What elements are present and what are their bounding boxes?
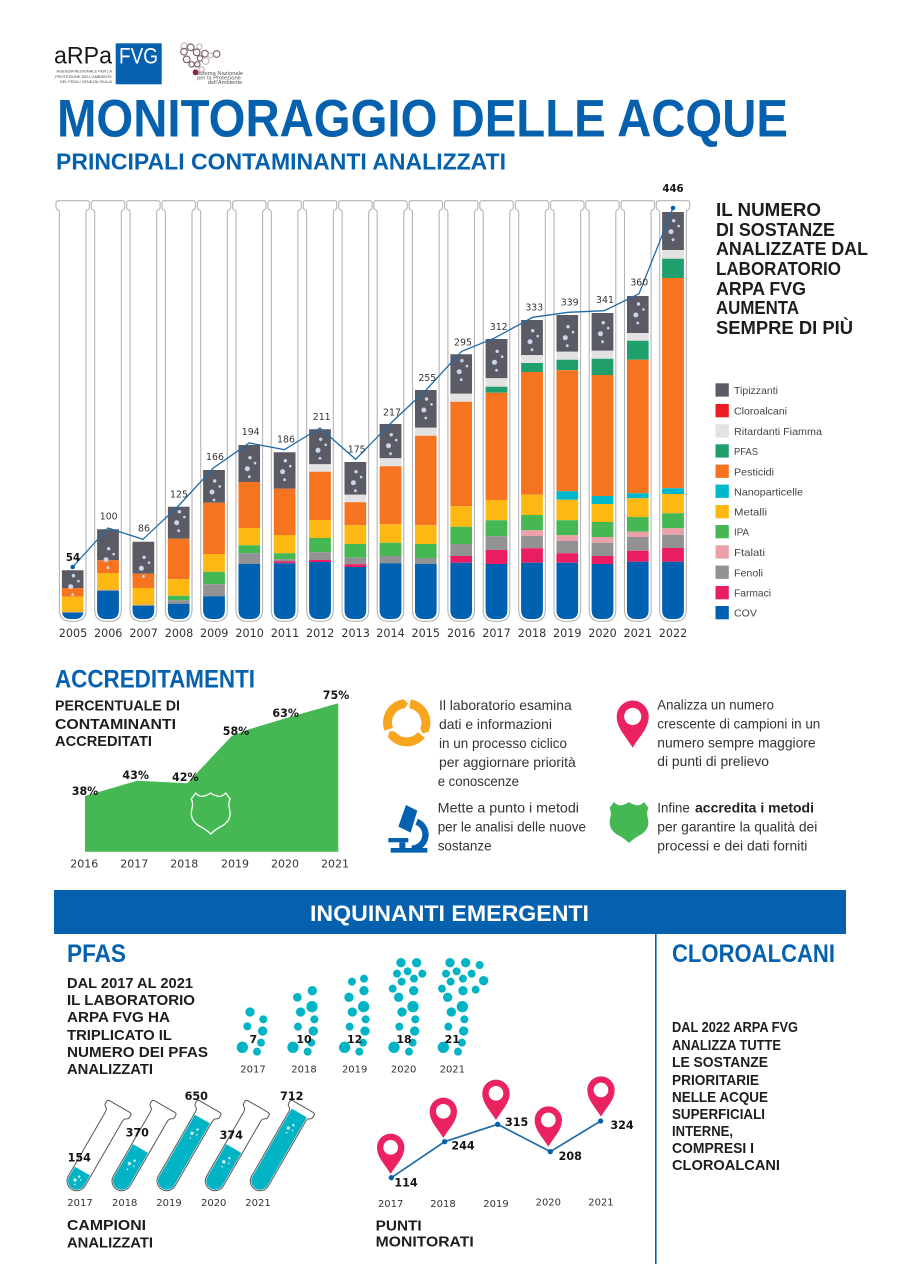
text: cloroalcani statement: COMPRESI I [672,1140,754,1157]
text: cloroalcani statement: SUPERFICIALI [672,1106,765,1123]
legend: IPA [734,528,749,539]
line chart: punti monitorati [377,1076,634,1210]
tube: 2007 [127,201,160,621]
year labels: 2008 [165,627,193,640]
sample years: 2021 [245,1198,271,1209]
text: punti monitorati: MONITORATI [376,1234,474,1251]
icon: microscope [388,805,427,853]
tube: 2017 [480,201,513,621]
logo: Sistema Nazionale per la Protezione dell'Ambiente: dell'Ambiente [208,80,242,86]
value labels: 100 [100,512,118,522]
tube: 2016 [444,201,478,621]
value labels: 211 [313,412,331,423]
year labels: 2010 [235,627,264,640]
point values: 315 [505,1116,528,1129]
tilted tube: 2018 [105,1100,177,1196]
tube: 2008 [162,201,195,621]
tube: 2014 [374,201,407,621]
point years: 2019 [483,1199,509,1210]
point years: 2021 [588,1197,614,1208]
text: accredita [657,799,817,854]
value labels: 339 [561,298,579,308]
value labels: 312 [490,322,508,333]
text: metodi: sostanze [438,838,492,854]
tube: 2011 [268,201,301,621]
year labels: 2021 [624,627,652,640]
sample counts: 370 [126,1126,149,1139]
bubbles: 2019 [339,975,370,1056]
text: campioni: numero sempre maggiore [657,734,816,750]
tube: 2010 [233,201,266,621]
logo: ARPA FVG: DEL FRIULI VENEZIA GIULIA [60,79,112,84]
sample years: 2018 [112,1198,137,1209]
text: punti monitorati: PUNTI [376,1218,422,1235]
bubbles: 2018 [287,986,318,1056]
bubble counts: 21 [445,1033,460,1046]
value labels: 217 [383,408,401,418]
text: ciclo [438,697,576,789]
value labels: 125 [170,490,188,500]
bubble counts: 18 [396,1033,412,1046]
area chart: accredited percentage [70,689,349,870]
pins [377,1076,615,1174]
sample counts: 712 [280,1090,303,1103]
value labels: 166 [206,452,224,463]
bubble years: 2017 [240,1065,266,1076]
tilted tube: 2021 [243,1100,315,1196]
trend line [70,206,675,569]
text: campioni: crescente di campioni in un [657,715,820,731]
year labels: 2022 [659,627,687,640]
logo: ARPA FVG: PROTEZIONE DELL'AMBIENTE [55,74,112,79]
point values: 244 [451,1139,475,1152]
heading: cloroalcani: CLOROALCANI [672,940,835,968]
heading: PFAS: PFAS [67,940,126,968]
icon: shield outline [191,793,230,834]
text: accredita: Infine [657,799,690,815]
bubble years: 2018 [291,1065,317,1076]
text: percentuale di contaminanti accreditati [55,699,180,750]
tilted tube: 2019 [150,1100,222,1196]
text: campioni analizzati: CAMPIONI [67,1217,146,1234]
year labels: 2019 [221,858,249,870]
tube: 2020 [586,201,619,621]
text: accredita: per garantire la qualità dei [657,819,817,835]
icon: green shield [610,802,648,843]
value labels: 333 [525,302,543,314]
sample counts [68,1090,303,1165]
statement: number of substances: LABORATORIO [716,258,841,279]
year labels: 2011 [271,627,299,640]
percentage labels: 38% [72,785,98,798]
text: percentuale di contaminanti accreditati: CONTAMINANTI [55,717,176,733]
logo: Sistema Nazionale per la Protezione dell'Ambiente: Sistema Nazionale [195,71,243,77]
text: ciclo: in un processo ciclico [439,735,567,751]
text: cloroalcani statement: LE SOSTANZE [672,1054,768,1071]
year labels: 2016 [447,627,475,640]
text: PFAS statement: TRIPLICATO IL [67,1027,172,1044]
value labels: 194 [242,427,260,438]
value labels: 446 [662,184,684,195]
legend: Fenoli [734,568,763,579]
text: cloroalcani statement: PRIORITARIE [672,1072,759,1089]
text: ciclo: Il laboratorio esamina [439,697,572,713]
point values: 114 [394,1176,418,1189]
legend: Farmaci [734,589,771,600]
text: punti monitorati [376,1218,474,1251]
year labels: 2005 [59,627,87,640]
sample years: 2020 [201,1198,226,1209]
sample years: 2017 [67,1198,93,1209]
bubble years: 2021 [440,1065,465,1076]
statement: number of substances: DI SOSTANZE [716,219,835,240]
text: metodi: Mette a punto i metodi [438,800,579,816]
year labels: 2018 [518,627,546,640]
year labels: 2019 [553,627,582,640]
percentage labels: 42% [172,771,199,784]
year labels: 2006 [94,627,122,640]
statement: number of substances: SEMPRE DI PIÙ [716,317,853,338]
banner: inquinanti emergenti: INQUINANTI EMERGENTI [310,901,589,926]
year labels [70,858,349,870]
legend: COV [734,609,757,620]
banner: inquinanti emergenti [54,890,846,934]
icon: cycle [379,698,429,751]
value labels: 255 [418,373,436,384]
year labels: 2015 [412,627,440,640]
year labels: 2007 [129,627,158,640]
year labels: 2012 [306,627,334,640]
text: cloroalcani statement: INTERNE, [672,1123,733,1140]
value labels: 295 [454,338,472,348]
value labels: 360 [630,278,648,288]
text: PFAS statement: ANALIZZATI [67,1061,153,1078]
tube: 2013 [339,201,372,621]
logo: ARPA FVG: aRPa [54,42,112,70]
legend: Pesticidi [734,467,774,478]
value labels: 341 [596,295,614,306]
title: MONITORAGGIO DELLE ACQUE [57,90,788,149]
year labels [59,627,687,640]
bubble chart: PFAS per year [237,958,488,1076]
statement: number of substances: AUMENTA [716,297,799,318]
subtitle: PRINCIPALI CONTAMINANTI ANALIZZATI [56,148,506,174]
statement: number of substances: IL NUMERO [716,199,821,220]
year labels: 2021 [321,858,349,870]
text: PFAS statement: IL LABORATORIO [67,992,195,1009]
point values: 324 [610,1119,634,1132]
text: campioni: Analizza un numero [657,696,774,712]
text: PFAS statement: NUMERO DEI PFAS [67,1044,208,1061]
point values [394,1116,634,1189]
icon: map pin [617,701,649,748]
legend: PFAS [734,447,758,458]
year labels: 2020 [271,858,299,870]
year labels: 2013 [341,627,370,640]
percentage labels: 63% [272,707,299,720]
text: cloroalcani statement: CLOROALCANI [672,1157,780,1174]
text: cloroalcani statement: DAL 2022 ARPA FVG [672,1019,798,1036]
sample counts: 374 [220,1129,243,1142]
text: cloroalcani statement: ANALIZZA TUTTE [672,1037,781,1054]
point years [378,1197,614,1210]
legend: Tipizzanti [734,386,778,397]
tube chart: substances per year [56,184,690,640]
text: accredita: processi e dei dati forniti [657,838,807,854]
sample years: 2019 [156,1198,182,1209]
bubble years: 2020 [391,1065,416,1076]
legend: Ftalati [734,548,765,559]
bubbles: 2021 [438,958,488,1056]
text: metodi [438,800,586,854]
year labels: 2020 [588,627,617,640]
tube: 2006 [91,201,125,621]
logo: Sistema Nazionale per la Protezione dell'Ambiente [181,43,243,86]
tube: 2018 [515,201,549,621]
statement: number of substances [716,199,868,338]
text: ciclo: per aggiornare priorità [439,754,576,770]
statement: number of substances: ARPA FVG [716,278,806,299]
legend: Metalli [734,508,767,519]
tube: 2015 [409,201,442,621]
logo: ARPA FVG [54,42,162,84]
trend line [389,1118,603,1180]
year labels: 2018 [170,858,198,870]
bubbles: 2020 [388,958,426,1056]
text: campioni [657,696,820,769]
value labels: 186 [277,434,295,446]
percentage labels [72,689,349,798]
tube: 2009 [197,201,231,621]
sample counts: 154 [68,1152,91,1165]
text: PFAS statement: ARPA FVG HA [67,1009,170,1026]
legend: Ritardanti Fiamma [734,427,822,438]
text: metodi: per le analisi delle nuove [438,819,586,835]
point years: 2020 [536,1197,561,1208]
value labels [66,184,684,564]
tilted tube: 2017 [60,1100,132,1196]
legend: Cloroalcani [734,407,787,418]
value labels: 175 [348,444,366,456]
text: ciclo: e conoscenze [438,773,519,789]
test tubes: campioni analizzati [60,1090,315,1209]
percentage labels: 43% [122,769,149,782]
heading: accreditamenti: ACCREDITAMENTI [55,665,255,693]
tube: 2005 [56,201,89,621]
year labels: 2009 [200,627,228,640]
year labels: 2014 [376,627,405,640]
sample counts: 650 [185,1090,208,1103]
year labels: 2017 [120,858,148,870]
bubble counts: 7 [250,1033,257,1046]
value labels: 86 [138,524,150,534]
text: PFAS statement: DAL 2017 AL 2021 [67,975,193,992]
text: campioni: di punti di prelievo [657,753,769,769]
year labels: 2017 [482,627,511,640]
text: accredita: accredita i metodi [695,799,814,815]
text: percentuale di contaminanti accreditati: ACCREDITATI [55,734,152,750]
bubble counts [250,1033,460,1046]
legend [716,383,822,620]
bubble counts: 12 [347,1033,362,1046]
sample years [67,1198,271,1209]
tube: 2019 [551,201,584,621]
bubbles: 2017 [237,1007,267,1056]
value labels: 54 [66,553,80,564]
point years: 2017 [378,1199,403,1210]
tilted tube: 2020 [198,1100,270,1196]
bubble years [240,1065,465,1076]
text: cloroalcani statement: NELLE ACQUE [672,1089,768,1106]
text: campioni analizzati: ANALIZZATI [67,1234,153,1251]
text: ciclo: dati e informazioni [439,716,552,732]
legend: Nanoparticelle [734,487,803,498]
percentage labels: 58% [223,725,249,738]
point values: 208 [559,1150,582,1163]
tube: 2022 [656,201,690,621]
text: campioni analizzati [67,1217,153,1251]
year labels: 2016 [70,858,98,870]
logo: ARPA FVG: FVG [119,44,158,68]
text: cloroalcani statement [672,1019,798,1174]
logo: Sistema Nazionale per la Protezione dell'Ambiente: per la Protezione [197,76,241,82]
bubble years: 2019 [342,1065,367,1076]
text: PFAS statement [67,975,208,1078]
tube: 2012 [303,201,337,621]
statement: number of substances: ANALIZZATE DAL [716,238,868,259]
logo: ARPA FVG: AGENZIA REGIONALE PER LA [56,68,112,74]
text: percentuale di contaminanti accreditati: PERCENTUALE DI [55,699,180,715]
bubble counts: 10 [296,1033,312,1046]
percentage labels: 75% [323,689,349,702]
tube: 2021 [621,201,654,621]
point years: 2018 [430,1199,456,1210]
